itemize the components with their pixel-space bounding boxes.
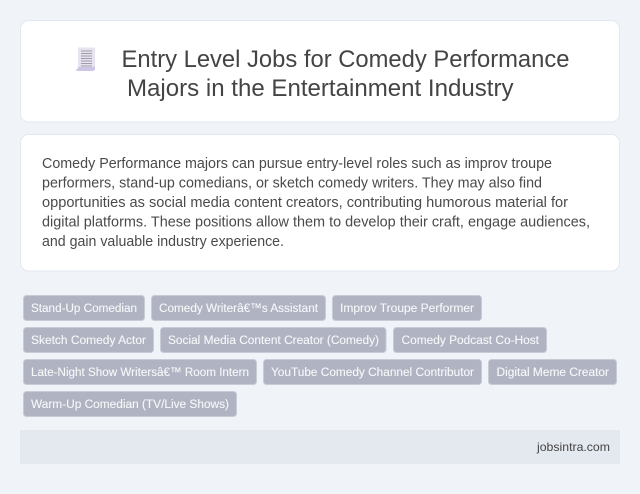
heading: title <box>122 46 570 102</box>
icon: paper receipt scroll <box>76 48 95 71</box>
tag: Warm-Up Comedian: Warm-Up Comedian (TV/Live Shows) <box>31 397 229 411</box>
tag: Digital Meme Creator <box>488 360 616 384</box>
tag: YouTube Comedy Channel Contributor <box>264 360 482 384</box>
text block: description: performers, stand-up comedians, or sketch comedy writers. They may also find <box>42 176 542 192</box>
tag: Warm-Up Comedian <box>24 392 236 416</box>
tag: Stand-Up Comedian <box>24 296 144 320</box>
tag: Sketch Comedy Actor <box>24 328 154 352</box>
tag: YouTube Comedy Channel Contributor: YouTube Comedy Channel Contributor <box>271 365 474 379</box>
tag: Comedy Writer's Assistant <box>152 296 326 320</box>
tag: Late-Night Show Writers' Room Intern <box>24 360 256 384</box>
tag: Digital Meme Creator: Digital Meme Creator <box>496 365 609 379</box>
text block: description: Comedy Performance majors can pursue entry-level roles such as improv troupe <box>42 156 552 172</box>
heading: title: Majors in the Entertainment Industry <box>127 75 514 102</box>
footer <box>20 430 620 464</box>
tag: Improv Troupe Performer: Improv Troupe Performer <box>340 301 474 315</box>
text block: description: digital platforms. These positions allow them to develop their craft, engage audiences, <box>42 214 590 230</box>
tag: Comedy Podcast Co-Host <box>394 328 546 352</box>
tag: Comedy Podcast Co-Host: Comedy Podcast Co-Host <box>402 333 540 347</box>
tag: Social Media Content Creator: Social Media Content Creator (Comedy) <box>168 333 379 347</box>
heading: title: Entry Level Jobs for Comedy Performance <box>122 46 570 73</box>
panel: description <box>20 134 620 271</box>
tag: Comedy Writer's Assistant: Comedy Writerâ€™s Assistant <box>159 301 319 315</box>
tag: Stand-Up Comedian: Stand-Up Comedian <box>31 301 137 315</box>
tag: Social Media Content Creator <box>160 328 386 352</box>
text block: description <box>42 156 590 250</box>
tag: Late-Night Show Writers' Room Intern: Late-Night Show Writersâ€™ Room Intern <box>31 365 249 379</box>
tag: Improv Troupe Performer <box>332 296 482 320</box>
panel: title header <box>20 20 620 122</box>
footer source text: jobsintra.com <box>536 440 610 454</box>
tag: Sketch Comedy Actor: Sketch Comedy Actor <box>31 333 146 347</box>
text block: description: and gain valuable industry experience. <box>42 234 284 250</box>
panel: job tags <box>24 296 616 416</box>
text block: description: opportunities as social media content creators, contributing humorous material for <box>42 195 568 211</box>
